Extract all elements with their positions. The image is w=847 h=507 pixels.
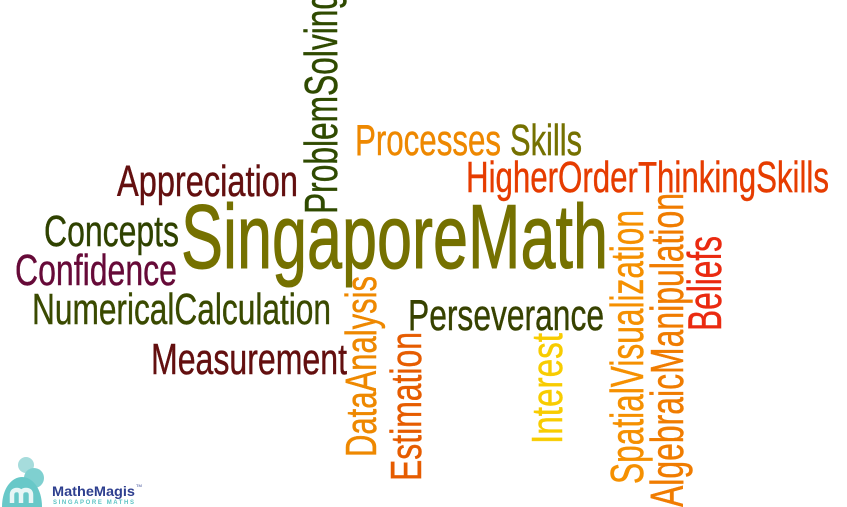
word: AlgebraicManipulation: AlgebraicManipulation	[641, 193, 693, 507]
word: SpatialVisualization: SpatialVisualization	[601, 210, 653, 484]
word: Estimation: Estimation	[382, 332, 431, 481]
logo trademark: TM	[136, 483, 142, 488]
word: Concepts: Concepts	[44, 207, 179, 256]
word: NumericalCalculation: NumericalCalculation	[32, 285, 331, 334]
word: Skills: Skills	[510, 116, 582, 165]
word: Processes: Processes	[355, 116, 501, 165]
word: Confidence: Confidence	[15, 246, 177, 295]
word: SingaporeMath: SingaporeMath	[181, 187, 608, 288]
logo: MatheMagis Singapore Maths	[2, 457, 142, 507]
icon: logo bubbles	[2, 457, 44, 507]
logo wordmark: MatheMagis	[52, 484, 135, 499]
word: Appreciation: Appreciation	[117, 157, 298, 206]
word: DataAnalysis: DataAnalysis	[337, 276, 386, 457]
logo tagline: SINGAPORE MATHS	[53, 500, 134, 506]
word: Interest: Interest	[523, 333, 572, 444]
word: Measurement: Measurement	[151, 335, 347, 384]
word: Perseverance: Perseverance	[408, 291, 604, 340]
word: Beliefs: Beliefs	[678, 236, 731, 331]
